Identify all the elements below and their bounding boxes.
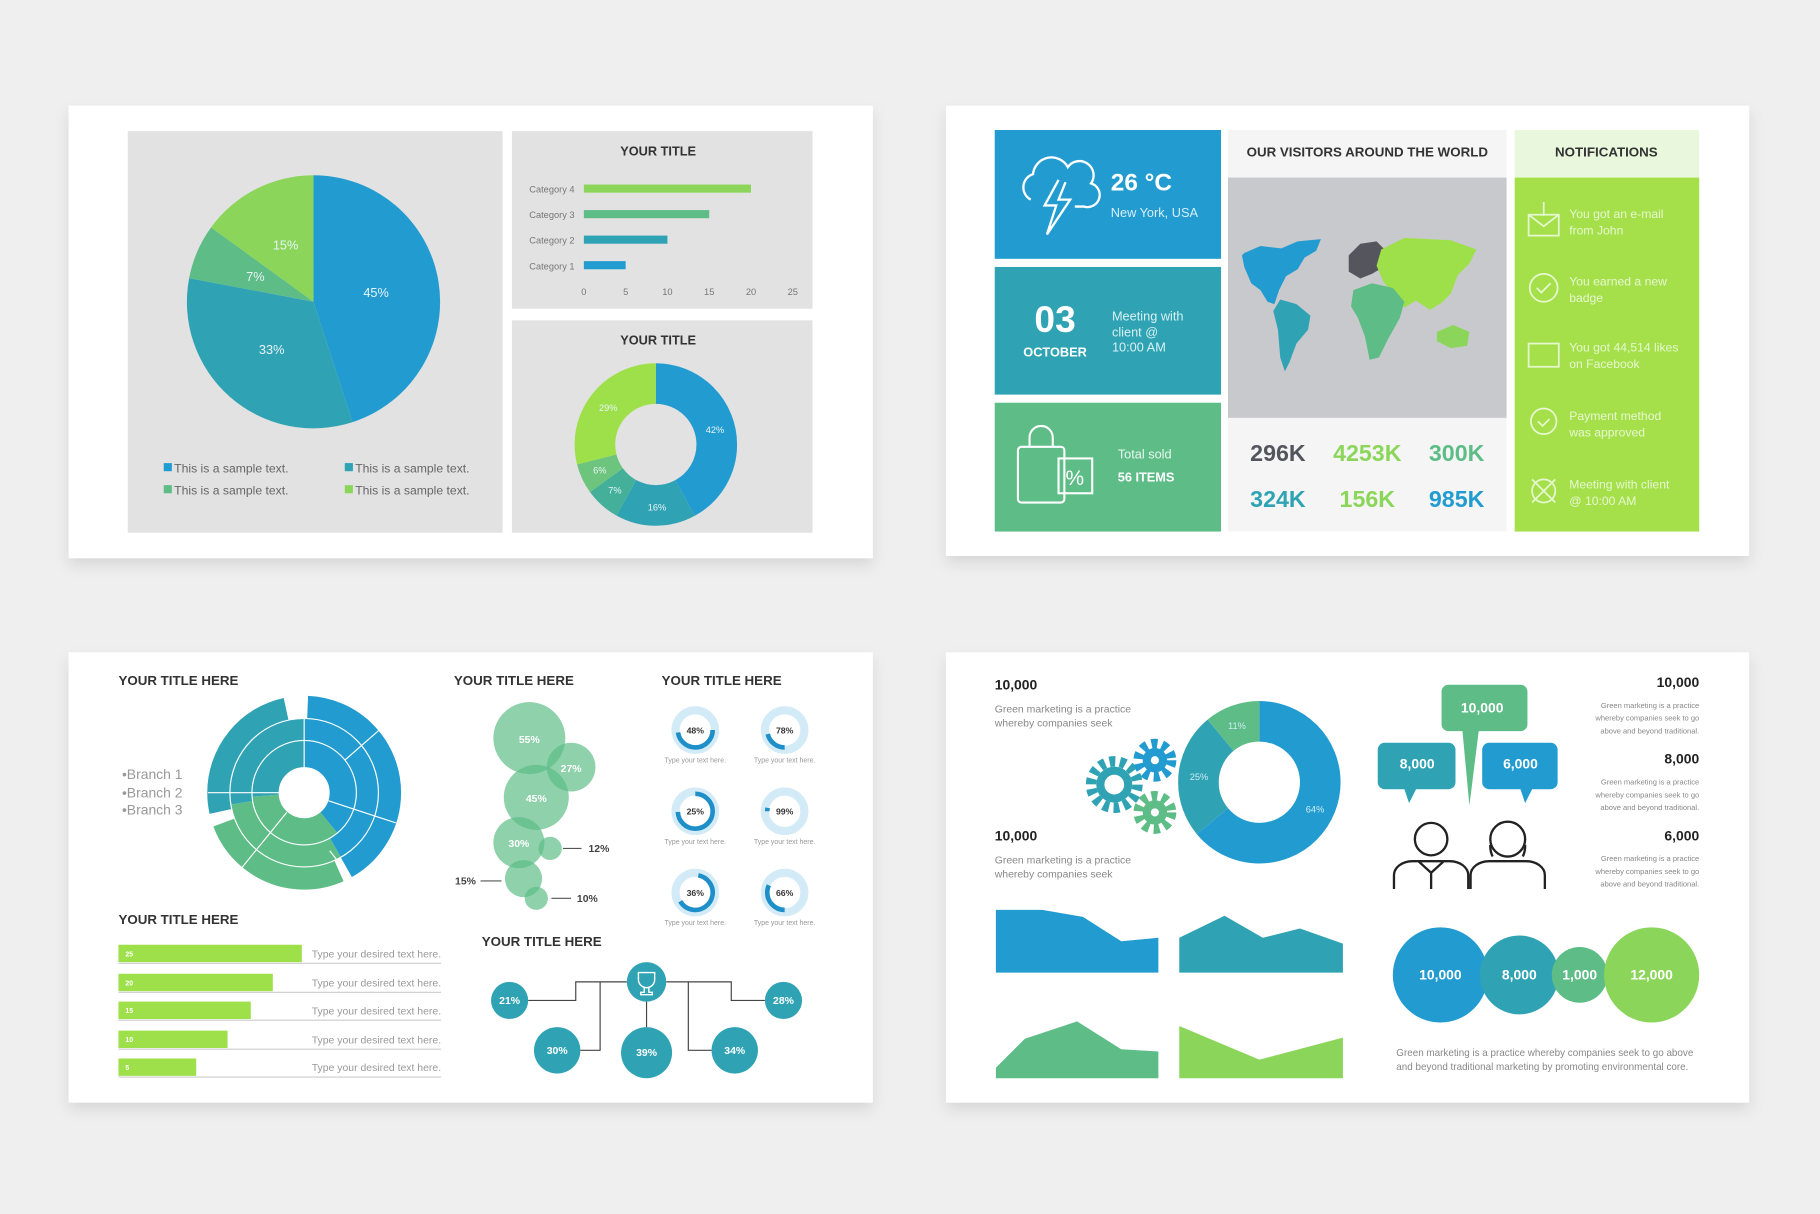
panel: bottom-right slide <box>946 652 1749 1103</box>
donut chart: 25% <box>1190 772 1208 782</box>
panel: pie chart: 45% <box>363 285 389 300</box>
bubble chart: 55% <box>519 735 540 746</box>
panel: donut chart <box>512 320 813 533</box>
text blocks: above and beyond traditional. <box>1600 727 1699 736</box>
flow chart: 21% <box>499 996 520 1007</box>
panel: notifications: NOTIFICATIONS <box>1555 145 1658 160</box>
panel: world map: OUR VISITORS AROUND THE WORLD <box>1247 145 1488 160</box>
text blocks: whereby companies seek <box>994 869 1113 880</box>
flow chart: 39% <box>636 1048 657 1059</box>
panel: bar chart: 5 <box>623 287 628 297</box>
panel: donut chart: 16% <box>648 503 666 513</box>
progress rings: Type your text here. <box>754 758 815 765</box>
bubble row: and beyond traditional marketing by promoting environmental core. <box>1396 1062 1688 1073</box>
horizontal bars: 5 <box>125 1065 129 1072</box>
sales tile: 56 ITEMS <box>1118 470 1174 485</box>
bubble chart: 27% <box>561 764 582 775</box>
panel: bottom-left slide <box>69 652 873 1103</box>
bubble chart: 15% <box>455 876 476 887</box>
donut chart: 64% <box>1306 804 1324 814</box>
panel: bar chart: Category 1 <box>529 261 575 271</box>
horizontal bars: 15 <box>125 1008 133 1015</box>
panel: notifications: from John <box>1569 223 1623 237</box>
panel: top-right slide <box>946 106 1749 556</box>
sales tile: Total sold <box>1118 446 1172 461</box>
legend <box>164 461 470 497</box>
weather tile: 26 °C <box>1111 169 1172 196</box>
panel: bar chart: 10 <box>662 287 673 297</box>
donut chart: 11% <box>1228 721 1246 731</box>
panel: donut chart: 7% <box>608 485 622 495</box>
legend: This is a sample text. <box>355 483 470 497</box>
stats numbers: 156K <box>1340 486 1395 512</box>
bubble row: 1,000 <box>1562 967 1597 983</box>
panel: bottom-left slide: YOUR TITLE HERE <box>662 673 782 688</box>
text blocks: Green marketing is a practice <box>995 705 1131 716</box>
panel: bar chart: YOUR TITLE <box>620 144 696 159</box>
panel: bar chart: 20 <box>746 287 756 297</box>
bubble chart: 12% <box>589 844 609 855</box>
bubble row: Green marketing is a practice whereby companies seek to go above <box>1396 1048 1694 1059</box>
sunburst chart: •Branch 2 <box>122 784 183 800</box>
progress rings: Type your text here. <box>754 839 815 846</box>
bubble row: 12,000 <box>1630 967 1673 983</box>
panel: bottom-left slide: YOUR TITLE HERE <box>482 934 602 949</box>
text blocks: Green marketing is a practice <box>1601 854 1699 863</box>
donut chart <box>1190 721 1324 843</box>
progress rings: 36% <box>687 888 704 898</box>
horizontal bars: 10 <box>125 1037 133 1044</box>
horizontal bars: Type your desired text here. <box>312 1063 441 1074</box>
icon: people <box>1394 822 1545 889</box>
panel: donut chart: YOUR TITLE <box>620 333 696 348</box>
sales tile <box>995 403 1221 532</box>
text blocks: 10,000 <box>995 676 1038 692</box>
text blocks: Green marketing is a practice <box>1601 778 1699 787</box>
legend: This is a sample text. <box>174 483 289 497</box>
text blocks: 8,000 <box>1664 751 1699 767</box>
panel: notifications: @ 10:00 AM <box>1569 494 1636 508</box>
progress rings: Type your text here. <box>665 758 726 765</box>
progress rings: 66% <box>776 888 794 898</box>
text blocks: 10,000 <box>995 827 1038 843</box>
icon: storm cloud <box>1023 157 1100 234</box>
date tile: 03 <box>1034 298 1076 340</box>
panel: pie chart <box>128 131 503 533</box>
flow chart: 30% <box>547 1046 568 1057</box>
panel: bar chart: Category 4 <box>529 185 575 195</box>
text blocks: 10,000 <box>1657 674 1699 690</box>
horizontal bars: 25 <box>125 951 133 958</box>
panel: pie chart: 7% <box>246 269 265 284</box>
flow chart <box>491 962 802 1078</box>
date tile: OCTOBER <box>1023 344 1087 359</box>
progress rings: 99% <box>776 807 794 817</box>
weather tile: New York, USA <box>1111 205 1198 220</box>
text blocks: whereby companies seek to go <box>1594 867 1699 876</box>
panel: bar chart: 25 <box>788 287 798 297</box>
bubble row <box>1393 927 1699 1073</box>
panel: world map <box>1228 130 1507 532</box>
icon: gears <box>1091 744 1171 829</box>
bubble row: 10,000 <box>1419 967 1462 983</box>
progress rings: Type your text here. <box>754 920 815 927</box>
panel: notifications: Meeting with client <box>1569 478 1670 492</box>
panel: donut chart: 6% <box>593 466 607 476</box>
stats numbers: 296K <box>1250 440 1306 466</box>
horizontal bars: Type your desired text here. <box>312 1006 441 1017</box>
area charts <box>996 910 1343 1078</box>
panel: notifications: You got an e-mail <box>1569 207 1664 221</box>
panel: notifications: You got 44,514 likes <box>1569 341 1678 355</box>
text blocks: above and beyond traditional. <box>1600 880 1699 889</box>
date tile <box>995 267 1221 395</box>
progress rings <box>665 710 815 927</box>
speech bubbles: 10,000 <box>1461 700 1504 716</box>
icon: shopping bag: % <box>1066 467 1084 490</box>
bubble chart: 10% <box>577 894 598 905</box>
panel: pie chart: 15% <box>273 238 298 253</box>
bubble chart <box>455 702 609 910</box>
progress rings: Type your text here. <box>665 920 726 927</box>
sunburst chart: •Branch 1 <box>122 766 183 782</box>
horizontal bars: Type your desired text here. <box>312 979 441 990</box>
progress rings: 48% <box>687 726 704 736</box>
sunburst chart: •Branch 3 <box>122 802 183 818</box>
sunburst chart <box>122 696 396 882</box>
panel: bottom-left slide: YOUR TITLE HERE <box>118 912 239 927</box>
flow chart: 34% <box>724 1046 745 1057</box>
panel: pie chart: 33% <box>259 342 284 357</box>
text blocks: above and beyond traditional. <box>1600 803 1699 812</box>
horizontal bars: Type your desired text here. <box>312 950 441 961</box>
panel: bar chart: Category 3 <box>529 210 575 220</box>
stats numbers: 985K <box>1429 486 1485 512</box>
panel: notifications: on Facebook <box>1569 357 1641 371</box>
panel: notifications: badge <box>1569 291 1603 305</box>
bubble row: 8,000 <box>1502 967 1537 983</box>
text blocks: whereby companies seek <box>994 719 1113 730</box>
stats numbers: 4253K <box>1333 440 1402 466</box>
stats numbers <box>1250 440 1485 512</box>
progress rings: 78% <box>776 726 794 736</box>
panel: top-left slide <box>69 106 873 558</box>
text blocks: whereby companies seek to go <box>1594 714 1699 723</box>
panel: donut chart: 42% <box>706 425 724 435</box>
flow chart: 28% <box>773 996 794 1007</box>
panel: bar chart: 0 <box>581 287 586 297</box>
icon: shopping bag <box>1018 426 1092 503</box>
speech bubbles: 6,000 <box>1503 755 1538 771</box>
panel: bar chart <box>512 131 813 309</box>
date tile: Meeting with <box>1112 308 1184 323</box>
panel: donut chart: 29% <box>599 403 618 413</box>
text blocks: 6,000 <box>1664 827 1699 843</box>
panel: bottom-left slide: YOUR TITLE HERE <box>118 673 239 688</box>
speech bubbles <box>1378 685 1558 805</box>
text blocks: Green marketing is a practice <box>995 855 1131 866</box>
panel: notifications: You earned a new <box>1569 275 1667 289</box>
progress rings: Type your text here. <box>665 839 726 846</box>
panel: bar chart: Category 2 <box>529 236 575 246</box>
progress rings: 25% <box>687 807 704 817</box>
stats numbers: 324K <box>1250 486 1306 512</box>
date tile: client @ <box>1112 325 1158 340</box>
horizontal bars: Type your desired text here. <box>312 1035 441 1046</box>
text blocks <box>994 674 1699 889</box>
legend: This is a sample text. <box>355 461 470 475</box>
text blocks: whereby companies seek to go <box>1594 790 1699 799</box>
panel: bottom-left slide: YOUR TITLE HERE <box>454 673 574 688</box>
speech bubbles: 8,000 <box>1400 755 1435 771</box>
date tile: 10:00 AM <box>1112 340 1166 355</box>
bubble chart: 30% <box>508 839 529 850</box>
panel: notifications <box>1515 130 1699 532</box>
weather tile <box>995 130 1221 259</box>
horizontal bars: 20 <box>125 980 133 987</box>
stats numbers: 300K <box>1429 440 1485 466</box>
panel: notifications: Payment method <box>1569 409 1661 423</box>
horizontal bars <box>118 945 441 1077</box>
text blocks: Green marketing is a practice <box>1601 701 1699 710</box>
bubble chart: 45% <box>526 794 547 805</box>
panel: notifications: was approved <box>1568 425 1645 439</box>
panel: bar chart: 15 <box>704 287 714 297</box>
legend: This is a sample text. <box>174 461 289 475</box>
